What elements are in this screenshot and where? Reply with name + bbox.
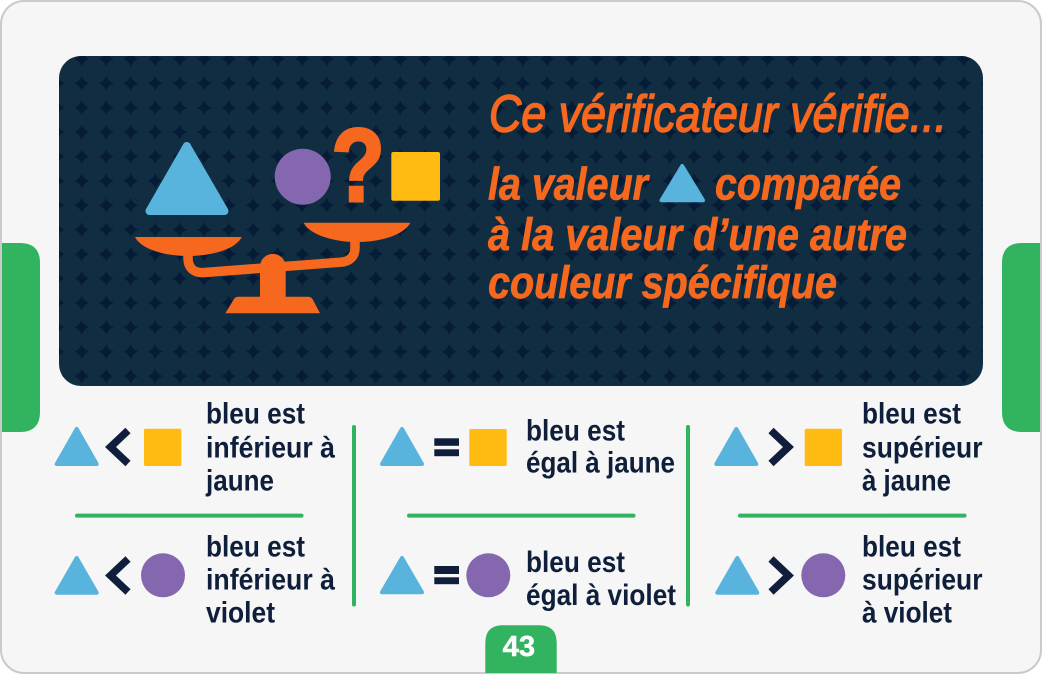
text block: la valeur comparée: la valeur [488, 158, 650, 209]
text block: la valeur comparée: à la valeur d’une autre [488, 209, 907, 260]
comparison: bleu inférieur à jaune: inférieur à [206, 431, 335, 464]
comparison: bleu égal à jaune: bleu est [526, 415, 625, 448]
comparison: bleu supérieur à violet [717, 531, 983, 630]
text block: la valeur comparée: couleur spécifique [488, 257, 837, 308]
right green tab [1002, 243, 1040, 432]
comparison: bleu inférieur à violet: bleu est [206, 531, 305, 564]
comparison: bleu égal à violet: bleu est [526, 546, 625, 579]
comparison: bleu inférieur à jaune [57, 397, 335, 498]
icon: balance scale with shapes [135, 108, 440, 313]
comparison: bleu inférieur à jaune: jaune [205, 465, 274, 498]
comparison: bleu inférieur à violet: inférieur à [206, 563, 335, 596]
comparison: bleu inférieur à violet [57, 531, 335, 630]
page number badge [485, 625, 557, 673]
text block: la valeur comparée [488, 158, 907, 308]
icon: blue triangle on scale [150, 146, 224, 211]
comparison: bleu supérieur à jaune: à jaune [862, 465, 951, 498]
comparison: bleu supérieur à jaune: supérieur [862, 431, 983, 464]
comparison: bleu égal à violet: égal à violet [526, 579, 676, 612]
left green tab [2, 243, 40, 432]
text block: la valeur comparée: comparée [715, 158, 901, 209]
comparison: bleu inférieur à violet: violet [206, 597, 275, 630]
icon: yellow square on scale [391, 152, 440, 201]
comparison: bleu supérieur à violet: bleu est [862, 531, 961, 564]
icon: purple circle on scale [275, 149, 331, 205]
comparison: bleu inférieur à jaune: bleu est [206, 397, 305, 430]
icon: blue triangle inline [662, 166, 703, 200]
comparison: bleu égal à jaune: égal à jaune [526, 447, 675, 480]
comparison: bleu égal à jaune [382, 415, 675, 480]
comparison: bleu supérieur à jaune [716, 397, 983, 498]
comparison: bleu égal à violet [382, 546, 676, 612]
comparison: bleu supérieur à violet: à violet [862, 597, 952, 630]
comparison: bleu supérieur à violet: supérieur [862, 563, 983, 596]
heading: Ce vérificateur vérifie: Ce vérificateur vérifie... [489, 86, 947, 144]
icon: question mark: ? [331, 108, 385, 224]
comparison: bleu supérieur à jaune: bleu est [862, 397, 961, 430]
page number badge: 43 [503, 631, 535, 663]
icon: scale body [135, 223, 410, 313]
